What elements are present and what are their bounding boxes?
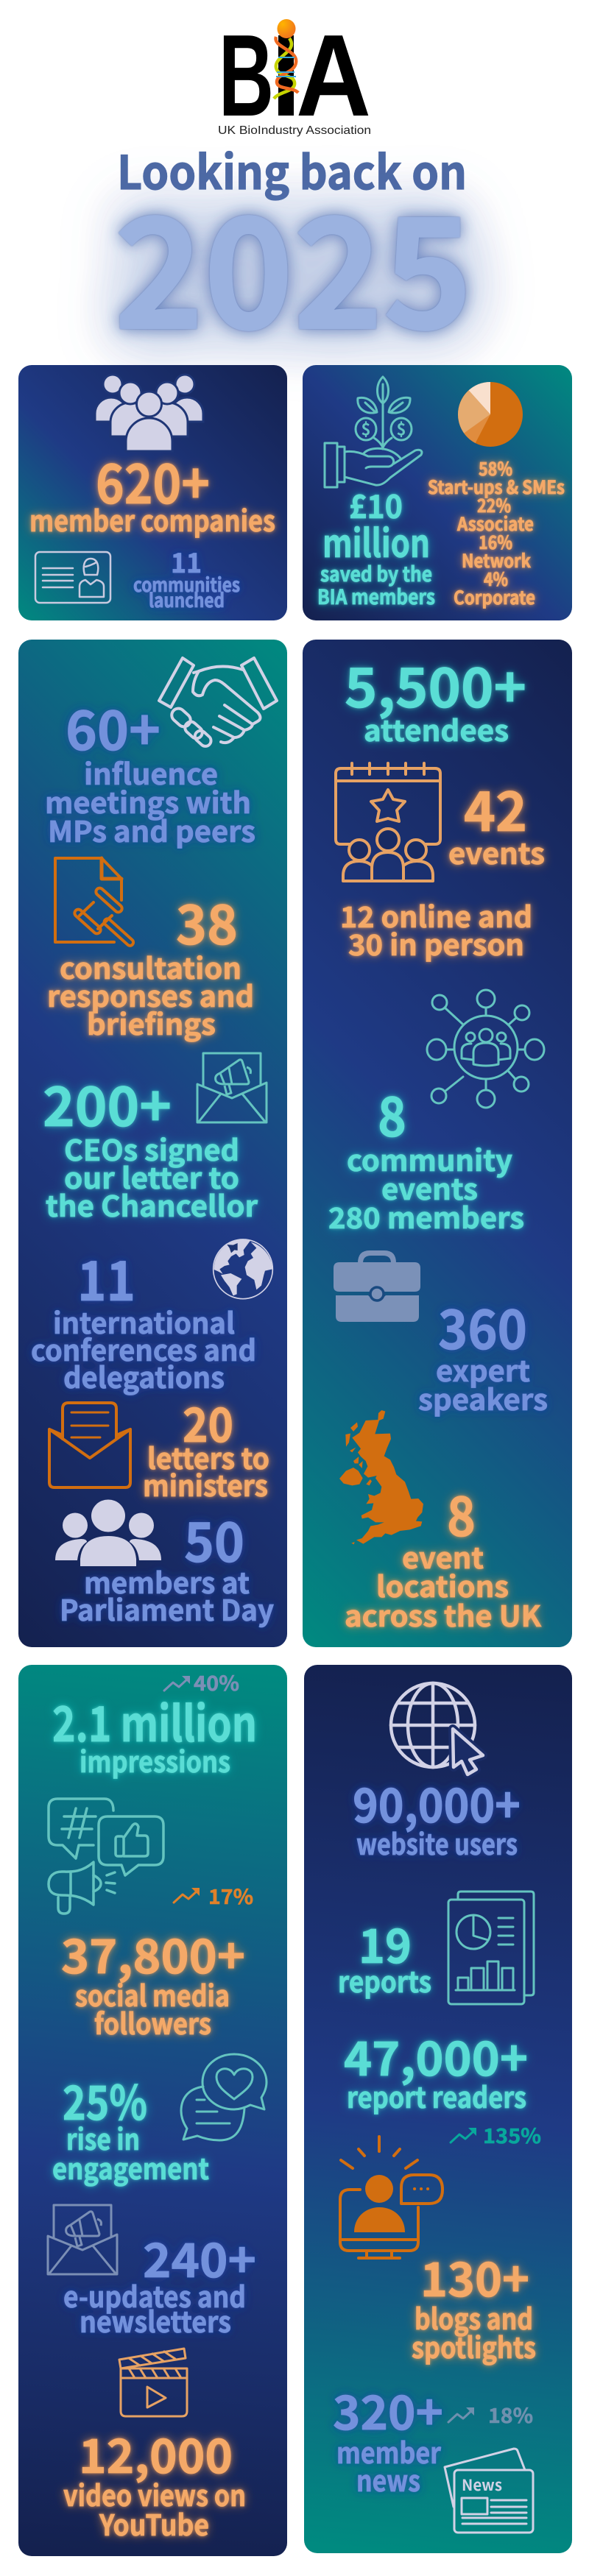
stat: 11 communities launched: launched xyxy=(149,586,225,613)
stat: 620+ member companies xyxy=(29,441,275,540)
icon: handshake xyxy=(159,658,277,749)
stat: 38 consultation responses: briefings xyxy=(87,1002,216,1044)
text: 12 online and 30 in person: 30 in person xyxy=(348,923,524,964)
icon: newspaper: News xyxy=(462,2474,502,2496)
stat: 37,800+ followers: 37,800+ xyxy=(61,1919,245,1987)
stat: 240+ e-updates and newsletters: 240+ xyxy=(143,2223,256,2291)
stat: 60+ influence meetings: meetings with xyxy=(45,781,251,822)
stat: 620+ member companies: member companies xyxy=(29,499,275,540)
stat: 8 community events: community xyxy=(347,1139,512,1180)
stat: 90,000+ website users: website users xyxy=(356,1822,518,1864)
stat: £10 million saved: saved by the xyxy=(320,559,432,588)
stat: 12,000 video views xyxy=(63,2419,246,2544)
panel: website and content xyxy=(304,1665,572,2553)
stat: 38 consultation responses: consultation xyxy=(60,946,241,988)
stat: 60+ influence meetings: influence xyxy=(84,752,218,793)
stat: 8 event locations: across the UK xyxy=(345,1594,541,1635)
icon: community network xyxy=(427,990,544,1108)
stat: 200+ CEOs signed: CEOs signed xyxy=(64,1128,239,1170)
stat: 130+ blogs and spotlights xyxy=(412,2243,536,2367)
text: membership breakdown: Network xyxy=(462,547,531,573)
logo: UK BioIndustry Association xyxy=(218,11,371,141)
stat: 11 international conferences: delegations xyxy=(63,1356,225,1397)
text: membership breakdown: 4% xyxy=(484,565,508,592)
stat: 12,000 video views: 12,000 xyxy=(79,2419,233,2487)
panel: membership xyxy=(18,365,287,620)
stat: 360 expert speakers: speakers xyxy=(418,1378,548,1419)
stat: 11 international conferences: 11 xyxy=(77,1238,135,1317)
stat: 25% rise in engagement: engagement xyxy=(52,2147,209,2188)
text: 12 online and 30 in person: 12 online and xyxy=(340,895,532,936)
stat: 620+ member companies: 620+ xyxy=(96,441,210,520)
stat: 200+ CEOs signed: our letter to xyxy=(64,1156,239,1197)
stat: 320+ member news: news xyxy=(356,2459,420,2500)
stat: 12,000 video views: YouTube xyxy=(99,2503,209,2544)
text: 18% growth: 18% xyxy=(488,2400,533,2430)
stat: 11 communities launched xyxy=(133,541,240,613)
stat: 19 reports: 19 xyxy=(359,1909,412,1977)
stat: 130+ blogs and spotlights: blogs and xyxy=(415,2297,533,2338)
panel: events xyxy=(303,640,572,1647)
stat: 47,000+ report readers: 47,000+ xyxy=(344,2022,528,2090)
heading: 2025: 2025 xyxy=(114,151,473,372)
stat: 25% rise in engagement: 25% xyxy=(63,2066,147,2134)
stat: 200+ CEOs signed: 200+ xyxy=(43,1064,172,1142)
stat: 8 community events: 280 members xyxy=(328,1196,524,1237)
stat: 19 reports xyxy=(338,1909,431,2001)
text: membership breakdown: Start-ups & SMEs xyxy=(428,473,565,500)
icon: document and gavel xyxy=(55,858,135,947)
text: 40% growth: 40% xyxy=(194,1668,239,1697)
icon: group of people xyxy=(95,375,203,451)
stat: 200+ CEOs signed xyxy=(43,1064,258,1225)
stat: 19 reports: reports xyxy=(338,1960,431,2001)
icon: ID card xyxy=(35,552,110,603)
icon: three people xyxy=(55,1500,161,1566)
icon: trend arrow 40% xyxy=(164,1676,190,1691)
panel: influence xyxy=(18,640,287,1647)
icon: envelope with megaphone xyxy=(48,2205,117,2274)
stat: 130+ blogs and spotlights: spotlights xyxy=(412,2326,536,2367)
stat: 20 letters to ministers: 20 xyxy=(183,1388,233,1456)
stat: 11 international conferences: international xyxy=(53,1301,235,1342)
icon: hand holding plant with coins: $ xyxy=(361,417,370,440)
stat: 50 members at Parliament Day xyxy=(60,1499,274,1630)
icon: trend arrow 17% xyxy=(174,1888,200,1903)
stat: 12,000 video views: video views on xyxy=(63,2474,246,2515)
stat: 130+ blogs and spotlights: 130+ xyxy=(420,2243,529,2310)
stat: 42 events: events xyxy=(448,832,545,873)
stat: 8 event locations: 8 xyxy=(447,1473,476,1552)
stat: 50 members at Parliament Day: Parliament Day xyxy=(60,1588,274,1630)
icon: calendar with audience xyxy=(336,763,440,881)
text: membership breakdown: Associate xyxy=(456,510,534,537)
stat: 8 event locations: event xyxy=(402,1536,484,1577)
stat: 8 community events: 8 xyxy=(378,1074,406,1153)
stat: 37,800+ followers: social media xyxy=(75,1974,230,2015)
text: membership breakdown: 58% xyxy=(479,455,512,481)
logo: UK BioIndustry Association: B xyxy=(219,11,274,141)
stat: 11 communities launched: communities xyxy=(133,570,240,598)
stat: 25% rise in engagement xyxy=(52,2066,209,2188)
heading: Looking back on: Looking back on xyxy=(117,136,467,203)
stat: 37,800+ followers: followers xyxy=(94,2002,211,2043)
stat: 38 consultation responses: 38 xyxy=(176,882,238,960)
stat: 60+ influence meetings: MPs and peers xyxy=(48,810,255,851)
stat: 8 event locations: locations xyxy=(376,1565,509,1606)
stat: 38 consultation responses: responses and xyxy=(47,974,254,1016)
stat: 320+ member news: member xyxy=(336,2431,442,2472)
stat: 20 letters to ministers xyxy=(143,1388,269,1505)
stat: 90,000+ website users: 90,000+ xyxy=(353,1769,521,1836)
stat: 37,800+ followers xyxy=(61,1919,245,2043)
icon: newspaper xyxy=(445,2449,533,2533)
stat: 2.1 million impressions: 2.1 million xyxy=(52,1685,257,1756)
icon: report document xyxy=(448,1892,534,2004)
text: 12 online and 30 in person xyxy=(340,895,532,964)
stat: 240+ e-updates and newsletters xyxy=(63,2223,256,2341)
text: membership breakdown: 16% xyxy=(479,528,512,555)
stat: 8 community events xyxy=(328,1074,524,1237)
stat: 11 international conferences xyxy=(31,1238,256,1397)
stat: 360 expert speakers: expert xyxy=(436,1349,530,1390)
text: 17% growth: 17% xyxy=(208,1881,253,1911)
stat: 240+ e-updates and newsletters: e-updates and xyxy=(63,2275,246,2316)
stat: 8 event locations xyxy=(345,1473,541,1635)
stat: 11 communities launched: 11 xyxy=(171,541,202,581)
stat: 2.1 million impressions xyxy=(52,1685,257,1781)
stat: 5,500+ attendees: attendees xyxy=(364,709,509,750)
icon: briefcase xyxy=(334,1250,420,1322)
icon: chat bubbles with heart xyxy=(181,2054,267,2140)
stat: 50 members at Parliament Day: 50 xyxy=(184,1499,244,1578)
icon: UK map xyxy=(339,1410,423,1544)
stat: 42 events: 42 xyxy=(464,768,527,847)
stat: 25% rise in engagement: rise in xyxy=(66,2117,140,2159)
icon: trend arrow 18% xyxy=(448,2407,474,2422)
stat: 200+ CEOs signed: the Chancellor xyxy=(46,1184,258,1225)
stat: £10 million saved xyxy=(317,481,435,611)
panel: savings and member mix xyxy=(303,365,572,620)
stat: 320+ member news xyxy=(333,2376,443,2500)
panel: social media and communications xyxy=(18,1665,287,2556)
icon: envelope with megaphone xyxy=(197,1053,267,1122)
text: 135% growth: 135% xyxy=(483,2120,541,2150)
stat: 360 expert speakers xyxy=(418,1287,548,1419)
icon: globe with cursor xyxy=(391,1683,483,1774)
stat: 5,500+ attendees: 5,500+ xyxy=(345,645,526,723)
stat: 20 letters to ministers: letters to xyxy=(147,1437,269,1478)
icon: open envelope with letter xyxy=(49,1403,130,1487)
icon: hand holding plant with coins: $ xyxy=(397,417,406,440)
stat: £10 million saved: £10 xyxy=(349,481,403,528)
text: membership breakdown: Corporate xyxy=(454,584,535,610)
logo: UK BioIndustry Association: A xyxy=(296,11,371,141)
stat: £10 million saved: million xyxy=(322,513,430,568)
stat: 38 consultation responses xyxy=(47,882,254,1044)
icon: clapperboard xyxy=(119,2349,187,2416)
text: membership breakdown: 22% xyxy=(477,492,511,518)
icon: hand holding plant with coins xyxy=(325,377,422,487)
chart: membership pie xyxy=(458,382,523,447)
icon: person on computer screen xyxy=(340,2137,442,2258)
stat: 240+ e-updates and newsletters: newsletters xyxy=(80,2300,231,2341)
stat: 20 letters to ministers: ministers xyxy=(143,1464,268,1505)
stat: 8 community events: events xyxy=(381,1167,478,1209)
stat: 60+ influence meetings xyxy=(45,687,255,851)
stat: 50 members at Parliament Day: members at xyxy=(84,1561,250,1602)
icon: social media xyxy=(49,1799,163,1914)
stat: 2.1 million impressions: impressions xyxy=(80,1740,230,1781)
logo: UK BioIndustry Association: UK BioIndustry Association xyxy=(218,124,371,137)
stat: 360 expert speakers: 360 xyxy=(438,1287,527,1365)
text: membership breakdown xyxy=(428,455,565,610)
stat: 320+ member news: 320+ xyxy=(333,2376,443,2444)
stat: 60+ influence meetings: 60+ xyxy=(66,687,161,766)
icon: globe xyxy=(214,1239,272,1299)
icon: trend arrow 135% xyxy=(451,2128,476,2142)
stat: 47,000+ report readers: report readers xyxy=(347,2076,526,2117)
stat: 42 events xyxy=(448,768,545,873)
stat: £10 million saved: BIA members xyxy=(317,581,435,611)
stat: 90,000+ website users xyxy=(353,1769,521,1864)
stat: 11 international conferences: conferences and xyxy=(31,1328,256,1370)
